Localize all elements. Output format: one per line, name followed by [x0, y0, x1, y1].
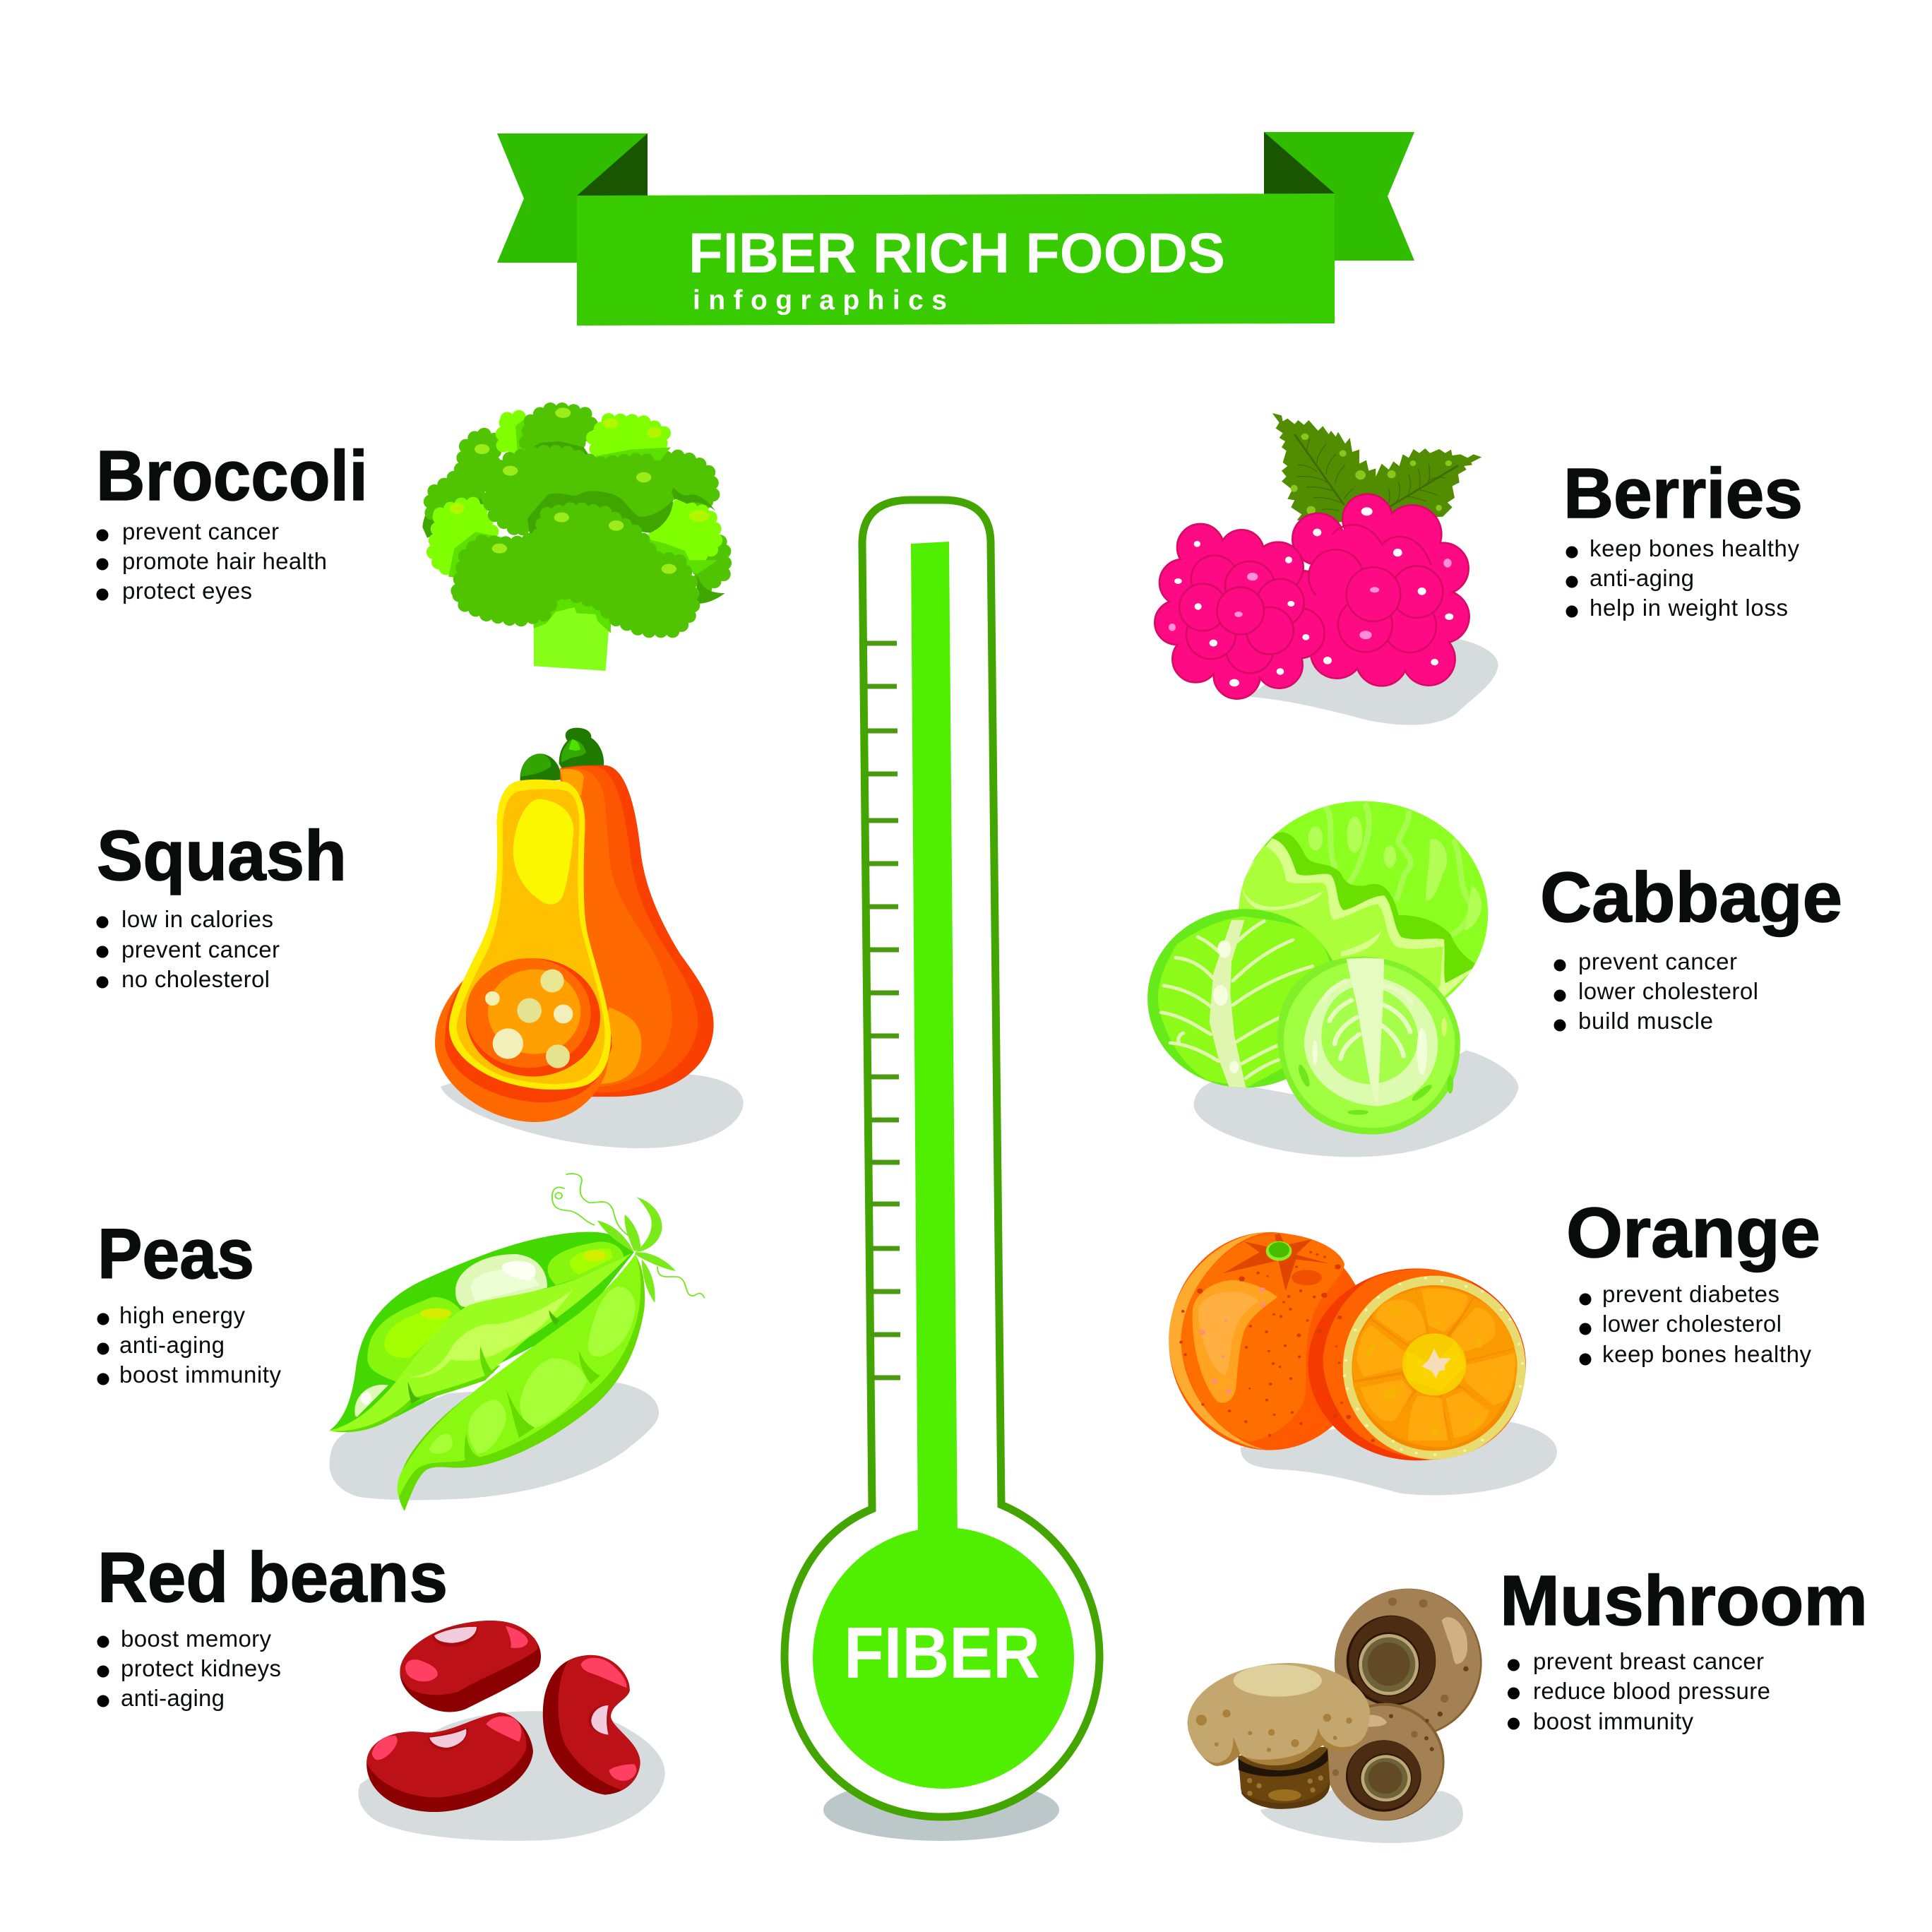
icon: red beans [358, 1621, 665, 1841]
text: berries [1563, 454, 1803, 621]
text: broccoli [96, 436, 368, 604]
icon: mushroom [1188, 1589, 1482, 1843]
text: peas: Peas [97, 1215, 254, 1294]
text: orange [1566, 1193, 1820, 1367]
text: cabbage: build muscle [1578, 1008, 1713, 1034]
text: red beans [97, 1538, 448, 1711]
text: red beans: Red beans [97, 1538, 448, 1617]
text: mushroom: Mushroom [1500, 1561, 1868, 1640]
text: cabbage [1540, 858, 1842, 1034]
title banner: FIBER RICH FOODS [688, 222, 1225, 285]
text: red beans: protect kidneys [121, 1655, 281, 1681]
icon: cabbage [1147, 801, 1518, 1157]
text: cabbage: prevent cancer [1578, 948, 1737, 974]
text: squash [96, 816, 347, 992]
text: peas: boost immunity [119, 1361, 281, 1388]
text: berries: anti-aging [1590, 565, 1694, 591]
text: cabbage: lower cholesterol [1578, 978, 1758, 1004]
text: broccoli: protect eyes [122, 578, 252, 604]
thermometer [785, 500, 1099, 1841]
icon: squash [435, 728, 744, 1148]
text: squash: no cholesterol [121, 966, 270, 992]
text: berries: keep bones healthy [1590, 535, 1799, 561]
text: squash: low in calories [121, 906, 273, 932]
text: squash: prevent cancer [121, 936, 280, 962]
text: cabbage: Cabbage [1540, 858, 1842, 937]
text: mushroom: prevent breast cancer [1533, 1648, 1764, 1674]
text: mushroom: reduce blood pressure [1533, 1678, 1770, 1704]
text: red beans: anti-aging [121, 1685, 225, 1711]
title banner: infographics [693, 285, 947, 316]
text: orange: Orange [1566, 1193, 1820, 1272]
text: peas: high energy [119, 1302, 246, 1328]
thermometer: FIBER [844, 1612, 1040, 1693]
text: squash: Squash [97, 816, 347, 895]
text: red beans: boost memory [121, 1626, 271, 1652]
text: berries: Berries [1563, 454, 1803, 533]
text: berries: help in weight loss [1590, 595, 1788, 621]
text: peas [97, 1215, 281, 1388]
icon: broccoli [422, 407, 725, 671]
icon: orange [1169, 1232, 1557, 1495]
text: mushroom: boost immunity [1533, 1708, 1693, 1734]
icon: peas [330, 1174, 705, 1511]
text: mushroom [1500, 1561, 1868, 1734]
title banner [497, 132, 1414, 326]
text: broccoli: promote hair health [122, 548, 327, 574]
text: orange: prevent diabetes [1602, 1281, 1779, 1307]
text: broccoli: prevent cancer [122, 518, 279, 544]
text: peas: anti-aging [119, 1332, 225, 1358]
text: broccoli: Broccoli [96, 436, 368, 515]
icon: berries [1156, 413, 1498, 725]
text: orange: lower cholesterol [1602, 1311, 1782, 1337]
text: orange: keep bones healthy [1602, 1341, 1812, 1367]
